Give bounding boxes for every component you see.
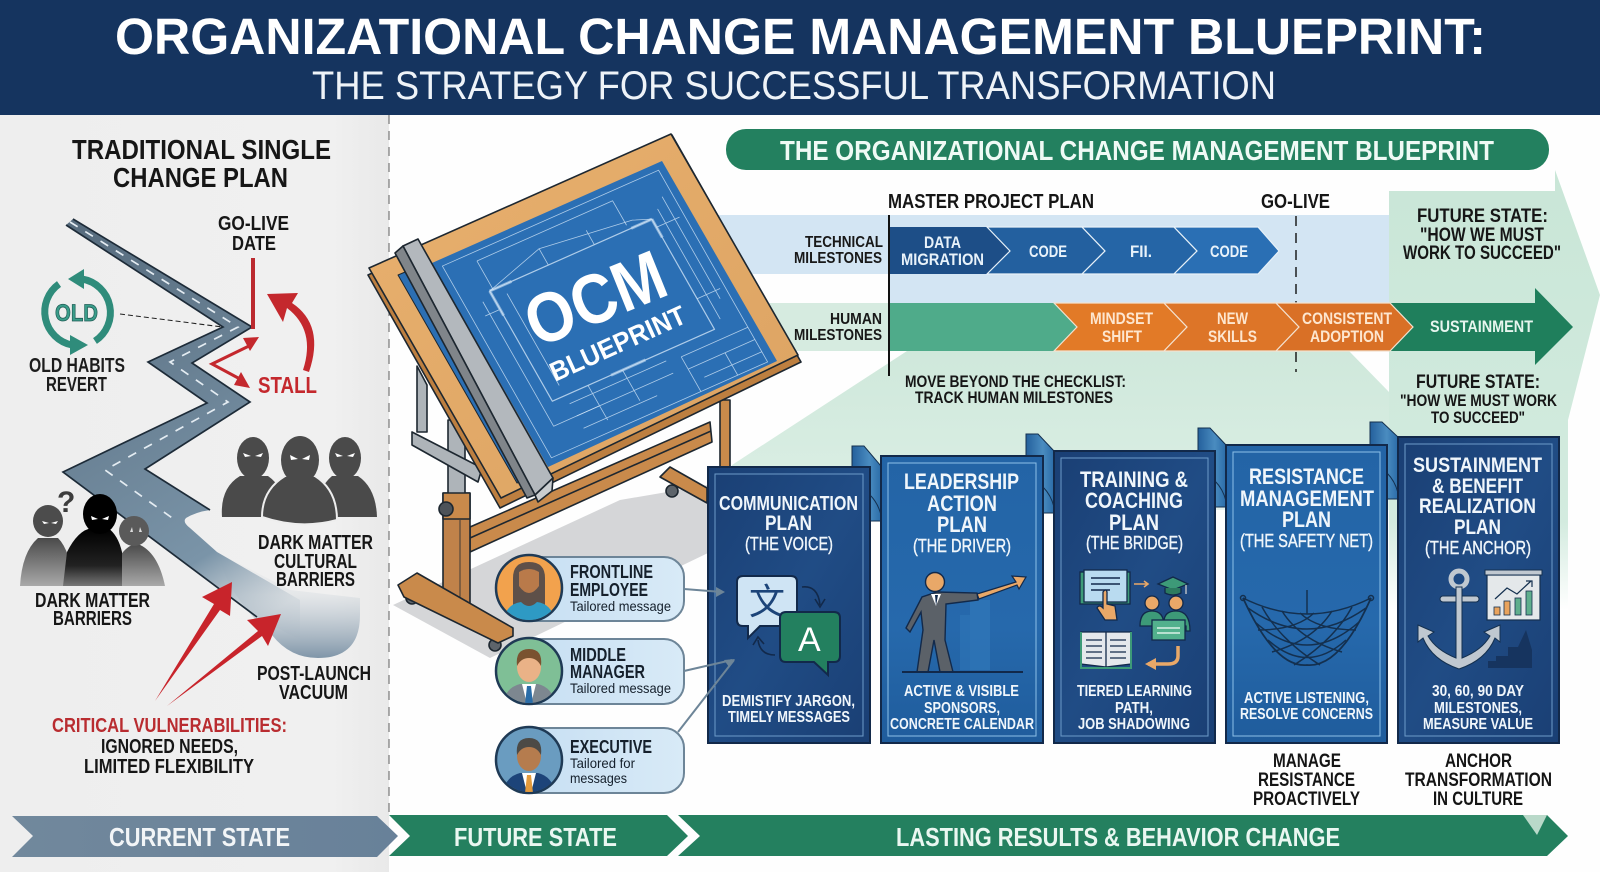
move beyond the checklist text bbox=[905, 372, 1126, 407]
training plan title: (THE BRIDGE) bbox=[1086, 533, 1183, 553]
post-launch vacuum label: POST-LAUNCH bbox=[257, 663, 371, 685]
caption: anchor transformation in culture: ANCHOR bbox=[1445, 751, 1512, 772]
dark matter cultural barriers label bbox=[258, 532, 373, 591]
panel: leadership action plan bbox=[881, 456, 1043, 743]
sustainment plan title: SUSTAINMENT bbox=[1413, 454, 1542, 477]
sustainment text: SUSTAINMENT bbox=[1430, 317, 1534, 336]
icon: old habits cycle: OLD bbox=[55, 300, 98, 327]
technical milestones label: MILESTONES bbox=[794, 250, 882, 267]
caption: manage resistance proactively: RESISTANCE bbox=[1258, 770, 1355, 791]
leadership plan description: ACTIVE & VISIBLE bbox=[904, 683, 1019, 700]
table legs and feet bbox=[398, 400, 730, 651]
panel: traditional single change plan bbox=[20, 134, 377, 778]
banner: current state: CURRENT STATE bbox=[109, 822, 290, 852]
heading: traditional plan bbox=[72, 134, 331, 193]
executive text: messages bbox=[570, 770, 627, 786]
old habits revert label bbox=[29, 355, 125, 396]
drawing board bbox=[368, 134, 801, 508]
sustainment plan title: REALIZATION bbox=[1419, 495, 1536, 518]
middle manager text: Tailored message bbox=[570, 680, 671, 696]
go-live date label bbox=[218, 213, 289, 255]
technical milestones label bbox=[794, 234, 883, 267]
leadership plan title bbox=[904, 469, 1019, 556]
leadership plan title: ACTION bbox=[927, 491, 997, 516]
dark matter cultural barriers label: CULTURAL bbox=[274, 551, 357, 573]
caption: anchor transformation in culture bbox=[1405, 751, 1552, 810]
training plan description: PATH, bbox=[1115, 700, 1153, 717]
go-live date label: DATE bbox=[232, 233, 276, 255]
future state quote upper: FUTURE STATE: bbox=[1417, 206, 1548, 227]
human chevron text: NEW bbox=[1217, 309, 1249, 328]
human chevron text: CONSISTENT bbox=[1302, 309, 1393, 328]
icon: translation bubbles bbox=[737, 576, 840, 675]
folder tabs behind plans bbox=[852, 422, 1398, 521]
persona: executive bbox=[496, 727, 684, 797]
resistance plan title: PLAN bbox=[1282, 507, 1331, 532]
middle manager text bbox=[570, 645, 671, 696]
stall label: STALL bbox=[258, 372, 317, 398]
dark matter barriers label: DARK MATTER bbox=[35, 590, 150, 612]
post-launch vacuum shape bbox=[217, 552, 360, 658]
technical chevron text: DATA bbox=[924, 233, 961, 252]
training plan description: TIERED LEARNING bbox=[1077, 683, 1192, 700]
icon: dark matter barrier figures: ? bbox=[57, 486, 75, 519]
communication plan description: DEMISTIFY JARGON, bbox=[722, 693, 855, 710]
human milestone track bbox=[889, 288, 1573, 365]
human milestones label: HUMAN bbox=[830, 311, 882, 328]
icon: skyline bbox=[1488, 630, 1532, 668]
BLUEPRINT lettering: BLUEPRINT bbox=[545, 300, 691, 387]
title: ORGANIZATIONAL CHANGE MANAGEMENT BLUEPRINT: bbox=[115, 8, 1486, 65]
master plan vertical marker bbox=[888, 215, 890, 376]
drafting table bbox=[368, 134, 801, 651]
post-launch vacuum label: VACUUM bbox=[279, 682, 348, 704]
banner: lasting results bbox=[678, 815, 1568, 856]
icon: learning path bbox=[1080, 570, 1190, 670]
chevron: data migration bbox=[889, 227, 1010, 274]
chevron: fil bbox=[1082, 227, 1197, 274]
caption: manage resistance proactively: MANAGE bbox=[1273, 751, 1341, 772]
resistance plan description bbox=[1240, 690, 1373, 723]
persona: frontline employee bbox=[496, 555, 684, 625]
go-live marker line bbox=[251, 258, 255, 329]
panel: sustainment and benefit realization plan bbox=[1398, 437, 1559, 743]
future state quote lower: TO SUCCEED" bbox=[1431, 408, 1525, 427]
panel: plans funnel background bbox=[732, 351, 1389, 510]
parallel rule bbox=[403, 239, 553, 495]
future state quote lower: FUTURE STATE: bbox=[1416, 372, 1540, 393]
resistance plan title: (THE SAFETY NET) bbox=[1240, 531, 1373, 551]
arrows: persona connectors bbox=[678, 587, 735, 732]
avatar: middle manager bbox=[496, 638, 562, 708]
sustainment plan title: (THE ANCHOR) bbox=[1425, 538, 1531, 558]
panel: resistance management plan bbox=[1226, 445, 1387, 743]
technical chevron text: CODE bbox=[1029, 242, 1067, 261]
future state quote upper: "HOW WE MUST bbox=[1420, 225, 1544, 246]
leadership plan description: CONCRETE CALENDAR bbox=[890, 716, 1034, 733]
communication plan description: TIMELY MESSAGES bbox=[728, 709, 850, 726]
chevron: code final bbox=[1174, 227, 1279, 274]
human milestones label: MILESTONES bbox=[794, 327, 882, 344]
banner: current state bbox=[12, 816, 398, 857]
go-live label: GO-LIVE bbox=[1261, 191, 1330, 213]
banner: lasting results: LASTING RESULTS & BEHAVIOR CHANGE bbox=[896, 822, 1340, 852]
sustainment plan description: MEASURE VALUE bbox=[1423, 716, 1533, 733]
leadership plan title: (THE DRIVER) bbox=[913, 536, 1011, 556]
avatar: executive bbox=[496, 727, 562, 797]
go-live date label: GO-LIVE bbox=[218, 213, 289, 235]
training plan title: COACHING bbox=[1085, 488, 1183, 513]
middle manager text: MIDDLE bbox=[570, 645, 626, 665]
timeline heading pill bbox=[726, 129, 1549, 170]
dark matter cultural barriers label: BARRIERS bbox=[276, 569, 355, 591]
icon: old habits cycle bbox=[45, 269, 110, 355]
dark matter barriers label bbox=[35, 590, 150, 630]
communication plan description bbox=[722, 693, 855, 726]
timeline heading pill: THE ORGANIZATIONAL CHANGE MANAGEMENT BLUEPRINT bbox=[780, 135, 1494, 166]
dark matter cultural barriers label: DARK MATTER bbox=[258, 532, 373, 554]
icon: translation bubbles: 文 bbox=[749, 581, 785, 622]
future state quote lower: "HOW WE MUST WORK bbox=[1400, 391, 1558, 410]
icon: leader pointing forward bbox=[902, 572, 1026, 672]
icon: dark matter cultural barrier figures bbox=[222, 436, 377, 524]
banner: future state bbox=[389, 815, 688, 856]
future state quote upper bbox=[1403, 206, 1561, 264]
band: technical background bbox=[700, 215, 1389, 303]
blueprint sheet bbox=[398, 270, 527, 483]
panel: training and coaching plan bbox=[1054, 451, 1215, 743]
icon: dark matter barrier figures bbox=[20, 486, 165, 586]
arrow: sustainment bbox=[1390, 288, 1573, 365]
move beyond the checklist text: TRACK HUMAN MILESTONES bbox=[915, 388, 1113, 407]
dashed leader from old habits bbox=[120, 314, 223, 327]
sustainment plan title: PLAN bbox=[1454, 516, 1501, 539]
middle manager text: MANAGER bbox=[570, 662, 645, 682]
icon: anchor bbox=[1418, 571, 1500, 669]
training plan description bbox=[1077, 683, 1192, 733]
band: human background bbox=[700, 303, 900, 351]
technical chevron text bbox=[901, 233, 1248, 269]
frontline employee text: FRONTLINE bbox=[570, 562, 653, 582]
arrow: curved red stall bbox=[267, 293, 314, 372]
executive text: EXECUTIVE bbox=[570, 737, 652, 757]
executive text: Tailored for bbox=[570, 755, 635, 771]
subtitle: THE STRATEGY FOR SUCCESSFUL TRANSFORMATION bbox=[312, 64, 1276, 108]
executive text bbox=[570, 737, 652, 786]
chevron: new skills bbox=[1164, 303, 1299, 351]
metal support bbox=[412, 366, 482, 519]
old habits revert label: REVERT bbox=[46, 374, 107, 396]
avatar: frontline employee bbox=[496, 555, 562, 625]
technical milestone chevrons bbox=[889, 227, 1279, 274]
communication plan title: COMMUNICATION bbox=[719, 493, 858, 515]
caption: manage resistance proactively bbox=[1253, 751, 1360, 810]
communication plan title bbox=[719, 493, 858, 554]
caption: anchor transformation in culture: TRANSFORMATION bbox=[1405, 770, 1552, 791]
human milestones label bbox=[794, 311, 882, 344]
resistance plan description: ACTIVE LISTENING, bbox=[1244, 690, 1369, 707]
sustainment plan description: MILESTONES, bbox=[1434, 700, 1522, 717]
sustainment plan description bbox=[1423, 683, 1533, 733]
technical chevron text: MIGRATION bbox=[901, 250, 984, 269]
blueprint drawing lines bbox=[442, 170, 768, 458]
icon: growth chart board bbox=[1485, 570, 1542, 620]
human chevron text: MINDSET bbox=[1090, 309, 1154, 328]
sustainment plan title bbox=[1413, 454, 1542, 558]
training plan description: JOB SHADOWING bbox=[1078, 716, 1190, 733]
leadership plan description bbox=[890, 683, 1034, 733]
resistance plan title: RESISTANCE bbox=[1249, 464, 1364, 489]
heading: traditional plan: TRADITIONAL SINGLE bbox=[72, 134, 331, 165]
sustainment plan description: 30, 60, 90 DAY bbox=[1432, 683, 1524, 700]
frontline employee text: Tailored message bbox=[570, 598, 671, 614]
leadership plan description: SPONSORS, bbox=[924, 700, 1000, 717]
panel: future state arrow background bbox=[1389, 170, 1600, 610]
master project plan label: MASTER PROJECT PLAN bbox=[888, 191, 1094, 213]
heading: traditional plan: CHANGE PLAN bbox=[113, 162, 288, 193]
resistance plan description: RESOLVE CONCERNS bbox=[1240, 706, 1373, 723]
zigzag road bbox=[63, 219, 300, 640]
chevron: code bbox=[987, 227, 1105, 274]
icon: safety net bbox=[1240, 590, 1374, 665]
technical chevron text: FII. bbox=[1130, 242, 1152, 261]
communication plan title: (THE VOICE) bbox=[745, 534, 833, 554]
old habits revert label: OLD HABITS bbox=[29, 355, 125, 377]
post-launch vacuum label bbox=[257, 663, 371, 704]
shadow under drafting table bbox=[393, 485, 708, 658]
caption: manage resistance proactively: PROACTIVELY bbox=[1253, 789, 1360, 810]
technical chevron text: CODE bbox=[1210, 242, 1248, 261]
training plan title: TRAINING & bbox=[1080, 467, 1188, 492]
leadership plan title: LEADERSHIP bbox=[904, 469, 1019, 494]
OCM lettering: OCM bbox=[513, 235, 677, 362]
future state quote lower bbox=[1400, 372, 1558, 427]
critical vulnerabilities text bbox=[52, 715, 287, 778]
frontline employee text bbox=[570, 562, 671, 614]
dark matter barriers label: BARRIERS bbox=[53, 608, 132, 630]
training plan title: PLAN bbox=[1109, 510, 1159, 535]
caption: anchor transformation in culture: IN CULTURE bbox=[1433, 789, 1523, 810]
human chevron text: SKILLS bbox=[1208, 327, 1257, 346]
sustainment plan title: & BENEFIT bbox=[1432, 475, 1523, 498]
frontline employee text: EMPLOYEE bbox=[570, 580, 648, 600]
banner: future state: FUTURE STATE bbox=[454, 822, 617, 852]
arrow: stall zigzag bbox=[212, 337, 259, 388]
communication plan title: PLAN bbox=[765, 512, 812, 535]
chevron: mindset shift bbox=[1054, 303, 1187, 351]
technical milestones label: TECHNICAL bbox=[805, 234, 883, 251]
arrows: critical vulnerabilities bbox=[155, 582, 281, 706]
resistance plan title: MANAGEMENT bbox=[1240, 486, 1374, 511]
human chevron text: ADOPTION bbox=[1310, 327, 1384, 346]
persona: middle manager bbox=[496, 638, 684, 708]
panel: current state background bbox=[0, 115, 389, 872]
leadership plan title: PLAN bbox=[937, 512, 987, 537]
go-live dashed marker bbox=[1295, 216, 1297, 372]
icon: translation bubbles: A bbox=[798, 621, 821, 659]
move beyond the checklist text: MOVE BEYOND THE CHECKLIST: bbox=[905, 372, 1126, 391]
panel: communication plan bbox=[708, 467, 870, 743]
future state quote upper: WORK TO SUCCEED" bbox=[1403, 243, 1561, 264]
critical vulnerabilities text: CRITICAL VULNERABILITIES: bbox=[52, 715, 287, 737]
human chevron text: SHIFT bbox=[1102, 327, 1142, 346]
chevron: consistent adoption bbox=[1276, 303, 1413, 351]
critical vulnerabilities text: IGNORED NEEDS, bbox=[101, 736, 238, 758]
resistance plan title bbox=[1240, 464, 1374, 551]
critical vulnerabilities text: LIMITED FLEXIBILITY bbox=[84, 756, 255, 778]
human chevron text bbox=[1090, 309, 1393, 346]
header banner bbox=[0, 0, 1600, 115]
training plan title bbox=[1080, 467, 1188, 553]
